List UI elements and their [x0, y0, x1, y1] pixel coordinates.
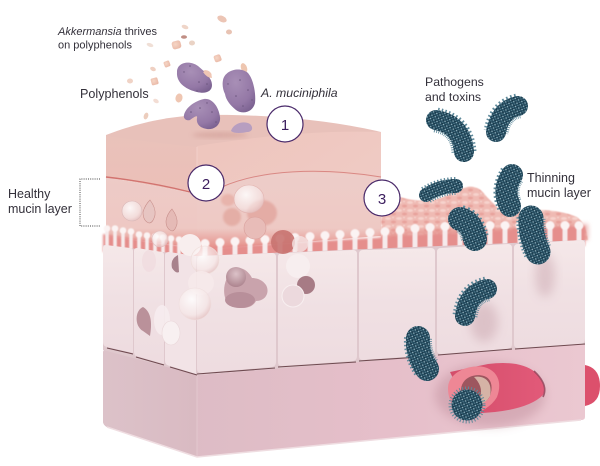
pathogen 6: [531, 218, 555, 297]
right face backdrop: [197, 132, 381, 250]
number 2: 2: [202, 176, 210, 193]
cell gap backdrop: [103, 240, 585, 375]
polyphenol particles: [127, 14, 249, 120]
pathogen 4: [506, 175, 512, 206]
label: Akkermansia thrives on polyphenols: on polyphenols: [58, 40, 133, 52]
pathogen 1: [436, 120, 464, 152]
label: Thinning mucin layer: Thinning: [527, 171, 575, 185]
capillary tube: [448, 363, 545, 414]
pathogen 9 in capillary: [450, 388, 484, 422]
number 1: 1: [281, 117, 289, 134]
pathogen 5: [460, 219, 475, 239]
healthy mucin lower left face: [106, 177, 197, 248]
mucin bubbles: [122, 185, 315, 345]
label: Akkermansia thrives on polyphenols: Akkermansia thrives: [58, 26, 157, 38]
label: Healthy mucin layer: mucin layer: [8, 202, 72, 216]
number 3: 3: [378, 191, 386, 208]
pathogen 3: [426, 186, 456, 195]
thinning mucin layer: [381, 187, 588, 250]
left face upper: [106, 136, 197, 194]
number 1: [267, 106, 303, 142]
base layer block with capillary: [103, 343, 600, 457]
red band beneath microvilli: [103, 226, 585, 262]
healthy mucin lower right face: [197, 172, 381, 250]
label: Polyphenols: Polyphenols: [80, 87, 149, 101]
pathogen 7: [465, 289, 498, 342]
bracket: healthy mucin layer: [80, 179, 100, 226]
bacteria: A. muciniphila: [177, 63, 255, 133]
pathogen 2: [496, 106, 518, 132]
microvilli: [104, 221, 583, 270]
label: Pathogens and toxins: Pathogens: [425, 75, 484, 89]
top face: [106, 115, 381, 150]
number 3: [364, 180, 400, 216]
label: Pathogens and toxins: and toxins: [425, 90, 481, 104]
upper mucus block: [106, 115, 381, 250]
capillary exit on the right: [585, 365, 600, 406]
label: Healthy mucin layer: Healthy: [8, 187, 51, 201]
label: Thinning mucin layer: mucin layer: [527, 186, 591, 200]
pathogen 8: [418, 338, 427, 369]
epithelial cells: [103, 221, 585, 375]
label: A. muciniphila: A. muciniphila: [260, 86, 338, 100]
number 2: [188, 165, 224, 201]
